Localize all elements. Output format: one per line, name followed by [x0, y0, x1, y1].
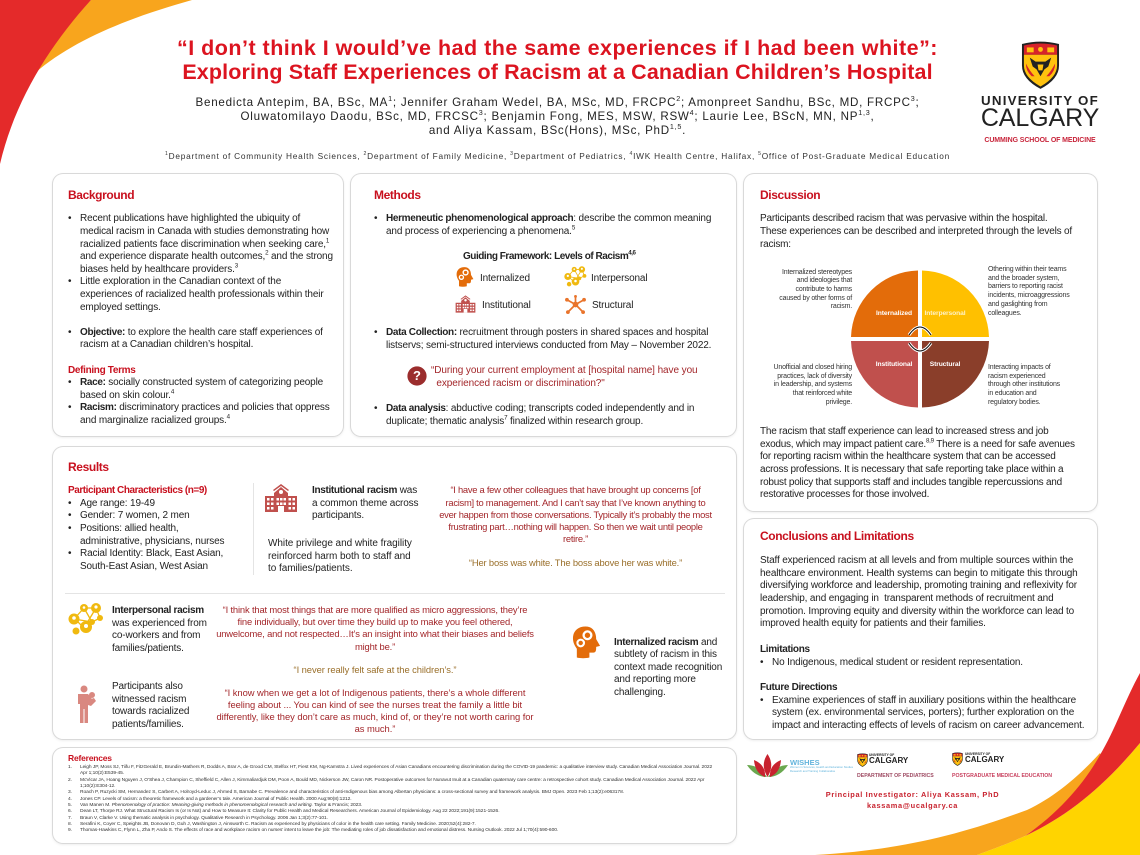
logo wordmark: Calgary: CALGARY [981, 104, 1099, 132]
white privilege text [268, 538, 412, 574]
reference list: 2. [68, 778, 72, 783]
icon: question mark [407, 366, 427, 386]
background text: based on skin colour.4 [80, 388, 174, 401]
label: institutional: Institutional [482, 300, 531, 311]
background text: Defining Terms [68, 365, 135, 376]
internalized racism text: subtlety of racism in this [614, 649, 717, 660]
logo: WISHES [747, 753, 847, 781]
quote: indigenous patients [216, 687, 534, 734]
corner swoosh: bottom right [816, 673, 1140, 855]
future directions: Examine experiences of staff in auxiliary positions within the healthcare [772, 695, 1076, 706]
background text: racism at a Canadian children’s hospital. [80, 339, 253, 350]
reference list: Thomas-Hawkins C, Flynn L, Zha P, Ando S. The effects of race and workplace racism on nurses’ intent to leave the job: The mediating roles of job dissatisfaction and emotional distress. Nursing Outlook. 2022 Jul 1;70(4):590-600. [80, 828, 558, 833]
participant characteristics: Positions: allied health, [80, 523, 179, 534]
reference list: 8. [68, 822, 72, 827]
background text: medical racism in Canada with studies demonstrating how [80, 226, 329, 237]
methods approach: Hermeneutic phenomenological approach: describe the common meaning [386, 213, 711, 224]
caption: internalized: and ideologies that [797, 277, 852, 284]
interpersonal racism text [112, 605, 207, 654]
internalized racism text [614, 637, 722, 700]
future directions: • [760, 695, 763, 706]
authors: Oluwatomilayo Daodu, BSc, MD, FRCSC3; Benjamin Fong, MES, MSW, RSW4; Laurie Lee, BScN, MN, NP1,3, [241, 108, 874, 123]
quote: institutional: retire.” [563, 533, 588, 544]
conclusions paragraph: leadership, and engaging in transparent methods of recruitment and [760, 593, 1053, 604]
background text: • [68, 327, 71, 338]
participant characteristics: • [68, 510, 71, 521]
institutional racism text: a common theme across [312, 498, 418, 509]
participant characteristics: administrative, physicians, nurses [80, 536, 224, 547]
conclusions paragraph: Staff experienced racism at all levels and from multiple sources within the [760, 555, 1073, 566]
interpersonal racism text: Interpersonal racism [112, 605, 204, 616]
future directions: impact and interacting effects of levels of racism on career advancement. [772, 720, 1084, 731]
authors: and Aliya Kassam, BSc(Hons), MSc, PhD1,5. [429, 122, 686, 137]
caption: internalized: contribute to harms [796, 286, 852, 293]
icon: network [564, 266, 586, 286]
data collection [374, 327, 711, 351]
quote: interpersonal: unwelcome, and not respected…It’s an insight into what their biases and beliefs [216, 628, 534, 639]
methods approach: • [374, 213, 377, 224]
reference list: McVicar JA, Hoang Nguyen J, O’Shea J, Champion C, Sheffield C, Allen J, Kimmaliardjuk DM, Poon A, Bould MD, Nickerson JW, Caron NR. Postoperative outcomes for Nunavut Inuit at a Canadian quaternary care centre: a retrospective cohort study. Canadian Medical Association Journal. 2022 Apr [80, 778, 704, 783]
icon: shield [1022, 42, 1060, 89]
caption: institutional: practices, lack of diversity [777, 373, 852, 380]
participant characteristics: South-East Asian, West Asian [80, 561, 208, 572]
internalized racism text: Internalized racism and [614, 637, 717, 648]
institutional racism text [312, 485, 418, 521]
reference list: Leigh JP, Moss SJ, Tiifu F, FitzGerald E, Brundin-Mathers R, Dodds A, Brar A, de Grood CM, Stelfox HT, Fiest KM, Ng-Kamstra J. Lived experiences of Asian Canadians encountering discrimination during the COVID-19 pandemic: a qualitative interview study. Canadian Medical Association Journal. 2022 [80, 765, 712, 770]
discussion intro: racism: [760, 239, 791, 250]
participant characteristics: Racial Identity: Black, East Asian, [80, 548, 223, 559]
conclusions paragraph: promotion. Improving equity and diversity within the workforce can lead to [760, 606, 1074, 617]
participant characteristics: • [68, 548, 71, 559]
heading: methods: Methods [374, 188, 421, 202]
data collection: Data Collection: recruitment through posters in shared spaces and hospital [386, 327, 708, 338]
discussion paragraph [760, 426, 1075, 500]
framework heading: Guiding Framework: Levels of Racism4,6 [463, 249, 635, 262]
icon: parent and child [78, 686, 96, 723]
quote: indigenous patients: “I know when we get a lot of Indigenous patients, there’s a whole different [225, 687, 525, 698]
principal investigator contact: Principal Investigator: Aliya Kassam, PhD [826, 790, 999, 799]
icon: interpersonal network [68, 603, 103, 634]
caption: internalized [779, 268, 852, 310]
reference list: 1. [68, 765, 72, 770]
background text: racialized patients face discrimination when seeking care,1 [80, 237, 329, 250]
title: “I don’t think I would’ve had the same experiences if I had been white”: [177, 36, 938, 60]
caption: institutional: in leadership, and systems [774, 381, 852, 388]
background text: • [68, 213, 71, 224]
methods approach: and process of experiencing a phenomena.5 [386, 225, 575, 237]
icon: building [456, 296, 476, 313]
background text: Objective: to explore the health care staff experiences of [80, 327, 323, 338]
quote: boss: “Her boss was white. The boss above her was white.” [469, 557, 682, 568]
quote: institutional: frustrating part…nothing will happen. So then we wait until people [448, 521, 703, 532]
background text: experiences of racialized health professionals within their [80, 289, 324, 300]
caption: internalized: caused by other forms of [779, 295, 852, 302]
participant characteristics: Age range: 19-49 [80, 498, 155, 509]
quote: institutional: “I have a few other colleagues that have brought up concerns [of [450, 484, 701, 495]
small wordmark: Calgary: CALGARY [965, 755, 1004, 764]
caption: interpersonal: Othering within their teams [988, 266, 1066, 273]
panel: methods [351, 174, 736, 436]
caption: interpersonal: colleagues. [988, 310, 1021, 317]
icon: head [456, 267, 474, 287]
pie label: interpersonal: Interpersonal [924, 310, 966, 317]
heading: background: Background [68, 188, 134, 202]
panel: background [53, 174, 343, 436]
corner swoosh: top left [0, 0, 192, 164]
caption: interpersonal: incidents, microaggressions [988, 292, 1070, 299]
discussion paragraph: robust policy that supports staff and includes tangible repercussions and [760, 477, 1062, 488]
future directions [760, 682, 1084, 731]
interview question [431, 365, 698, 389]
caption: structural [988, 364, 1060, 406]
background text: biases held by healthcare providers.3 [80, 263, 238, 275]
conclusions paragraph [760, 555, 1078, 629]
reference list: Dean LT, Thorpe RJ. What Structural Racism Is (or Is Not) and How to Measure It: Clarity for Public Health and Medical Researchers. American Journal of Epidemiology. Aug 22 2022;191(9):1521-1526. [80, 809, 499, 814]
institutional racism text: Institutional racism was [312, 485, 417, 496]
conclusions paragraph: diversifying workforce and leadership, promoting training and reflexivity for [760, 580, 1077, 591]
small wordmark: UNIVERSITY OF [869, 753, 894, 757]
data analysis: Data analysis: abductive coding; transcripts coded independently and in [386, 403, 694, 414]
internalized racism text: context made recognition [614, 662, 722, 673]
caption: interpersonal: and the broader system, [988, 275, 1059, 282]
data collection: • [374, 327, 377, 338]
background text: • [68, 377, 71, 388]
reference list: 1;10(2):E304-12. [80, 784, 115, 789]
authors [196, 94, 919, 137]
caption: structural: in education and [988, 390, 1036, 397]
reference list: Jones CP. Levels of racism: a theoretic framework and a gardener’s tale. American Journal of Public Health. 2000 Aug;90(8):1212. [80, 797, 352, 802]
discussion intro: Participants described racism that was pervasive within the hospital. [760, 213, 1047, 224]
discussion paragraph: The racism that staff experience can lead to increased stress and job [760, 426, 1048, 437]
icon: shield small [857, 753, 868, 767]
internalized racism text: challenging. [614, 687, 666, 698]
interpersonal racism text: co-workers and from [112, 630, 200, 641]
icon: structural [565, 295, 586, 314]
caption: interpersonal: barriers to reporting racist [988, 283, 1063, 290]
authors: Benedicta Antepim, BA, BSc, MA1; Jennifer Graham Wedel, BA, MSc, MD, FRCPC2; Amonpreet Sandhu, BSc, MD, FRCPC3; [196, 94, 919, 108]
heading: results: Results [68, 460, 109, 474]
white privilege text: White privilege and white fragility [268, 538, 412, 549]
limitations: Limitations [760, 644, 810, 655]
background text: • [68, 276, 71, 287]
heading: references: References [68, 753, 112, 763]
caption: structural: through other institutions [988, 381, 1060, 388]
quote: interpersonal: “I think that most things that are more qualified as micro aggressions, they’re [223, 604, 527, 615]
small wordmark: Calgary: CALGARY [869, 756, 908, 765]
quote: interpersonal [216, 604, 534, 652]
participant characteristics [68, 485, 224, 572]
caption: institutional: that reinforced white [793, 390, 852, 397]
small wordmark: UNIVERSITY OF [965, 752, 990, 756]
background text: and marginalize racialized groups.4 [80, 414, 230, 426]
background text: Race: socially constructed system of categorizing people [80, 377, 323, 388]
participant characteristics: Gender: 7 women, 2 men [80, 510, 190, 521]
reference list: 4. [68, 797, 72, 802]
witnessed racism text: witnessed racism [112, 694, 186, 705]
discussion intro [760, 213, 1072, 250]
caption: internalized: racism. [831, 303, 852, 310]
title [177, 36, 938, 84]
witnessed racism text: patients/families. [112, 719, 184, 730]
caption: structural: regulatory bodies. [988, 399, 1040, 406]
icon: lotus [747, 753, 789, 779]
interpersonal racism text: was experienced from [112, 618, 207, 629]
witnessed racism text [112, 681, 189, 730]
department label: DEPARTMENT OF PEDIATRICS [857, 773, 934, 779]
white privilege text: to families/patients. [268, 563, 353, 574]
methods approach [374, 213, 711, 237]
data collection: listservs; semi-structured interviews conducted from May – November 2022. [386, 340, 711, 351]
interview question: experienced racism or discrimination?" [436, 378, 605, 389]
wishes tagline: Women in Sciences, Health and Education Studies [790, 765, 853, 769]
icon: question mark: ? [413, 368, 421, 383]
department label: POSTGRADUATE MEDICAL EDUCATION [952, 772, 1052, 778]
label: structural: Structural [592, 300, 633, 311]
data analysis: • [374, 403, 377, 414]
limitations: No Indigenous, medical student or resident representation. [772, 657, 1023, 668]
wishes tagline [790, 766, 853, 773]
reference list: Serafini K, Coyer C, Speights JB, Donovan D, Guh J, Washington J, Ainsworth C. Racism as experienced by physicians of color in the health care setting. Family Medicine. 2020;52(4):282-7. [80, 822, 476, 827]
discussion paragraph: for reporting racism within the healthcare system that can be accessed [760, 451, 1056, 462]
discussion paragraph: exodus, which may impact patient care.8,9 There is a need for safe avenues [760, 437, 1075, 450]
background text: employed settings. [80, 302, 161, 313]
witnessed racism text: Participants also [112, 681, 183, 692]
wishes wordmark: WISHES [790, 758, 820, 767]
reference list: 7. [68, 816, 72, 821]
panel: references [53, 748, 736, 843]
framework legend [456, 266, 647, 314]
icon: shield small [952, 752, 963, 766]
future directions: Future Directions [760, 682, 837, 693]
label: interpersonal: Interpersonal [591, 273, 647, 284]
reference list: Braun V, Clarke V. Using thematic analysis in psychology. Qualitative Research in Psychology. 2006 Jan 1;3(2):77-101. [80, 816, 328, 821]
witnessed racism text: towards racialized [112, 706, 189, 717]
limitations [760, 644, 1023, 668]
heading: conclusions: Conclusions and Limitations [760, 529, 914, 543]
wishes tagline: Research and Training Collaborative [790, 768, 835, 772]
quote: interpersonal: fine individually, but over time they build up to make you feel othered, [238, 616, 512, 627]
affiliations: 1Department of Community Health Sciences, 2Department of Family Medicine, 3Department of Pediatrics, 4IWK Health Centre, Halifax, 5Office of Post-Graduate Medical Education [165, 151, 950, 161]
future directions: system (ex. environmental services, porters); further exploration on the [772, 707, 1074, 718]
reference list: Apr 1;10(2):E539-45. [80, 771, 124, 776]
icon: institutional building [265, 484, 297, 512]
quote: never felt safe: “I never really felt safe at the children’s.” [294, 664, 456, 675]
background text: Racism: discriminatory practices and policies that oppress [80, 402, 330, 413]
caption: institutional: Unofficial and closed hiring [774, 364, 852, 371]
logo wordmark: UNIVERSITY OF [981, 93, 1099, 108]
interpersonal racism text: families/patients. [112, 643, 184, 654]
quote: institutional [439, 484, 712, 544]
reference list: 9. [68, 828, 72, 833]
discussion paragraph: restorative processes for those involved. [760, 489, 929, 500]
panel: results [53, 447, 736, 739]
caption: interpersonal [988, 266, 1070, 317]
quote: indigenous patients: as much.” [355, 723, 395, 734]
logo subtitle: CUMMING SCHOOL OF MEDICINE [984, 137, 1096, 144]
white privilege text: reinforced harm both to staff and [268, 551, 411, 562]
background text: and experience disparate health outcomes,2 and the strong [80, 250, 333, 262]
reference list [68, 765, 712, 835]
data analysis [374, 403, 694, 427]
background text [68, 213, 333, 426]
discussion paragraph: across professions. It is necessary that safe reporting take place within a [760, 464, 1063, 475]
limitations: • [760, 657, 763, 668]
reference list: Van Manen M. Phenomenology of practice: Meaning-giving methods in phenomenological research and writing. Taylor & Francis; 2023. [80, 803, 362, 808]
logo: postgraduate medical education [952, 752, 1056, 780]
participant characteristics: Participant Characteristics (n=9) [68, 485, 207, 496]
panel: conclusions and limitations [744, 519, 1097, 739]
conclusions paragraph: healthcare environment. Health systems can begin to mitigate this through [760, 568, 1078, 579]
quote: indigenous patients: feeling about ... You can kind of see the nurses treat the family a little bit [228, 699, 522, 710]
heading: discussion: Discussion [760, 188, 820, 202]
caption: internalized: Internalized stereotypes [782, 268, 852, 276]
internalized racism text: and reporting more [614, 674, 696, 685]
quote: institutional: racism] to management. And I can’t say that I’ve known anything to [446, 497, 705, 508]
quote: indigenous patients: differently, like they don’t care as much, kind of, or they’re not worth caring for [216, 711, 534, 722]
pie label: structural: Structural [930, 361, 960, 368]
reference list: 5. [68, 803, 72, 808]
principal investigator contact: kassama@ucalgary.ca [867, 801, 958, 810]
pie label: institutional: Institutional [876, 361, 912, 368]
caption: interpersonal: and gaslighting from [988, 301, 1047, 308]
caption: institutional: privilege. [826, 399, 852, 406]
label: internalized: Internalized [480, 273, 530, 284]
background text: Little exploration in the Canadian context of the [80, 276, 281, 287]
principal investigator contact [800, 790, 1025, 811]
background text: Recent publications have highlighted the ubiquity of [80, 213, 300, 224]
pie label: internalized: Internalized [876, 310, 912, 317]
reference list: 3. [68, 790, 72, 795]
icon: internalized head [572, 626, 601, 659]
interview question: “During your current employment at [hospital name] have you [431, 365, 698, 376]
participant characteristics: • [68, 523, 71, 534]
panel: discussion [744, 174, 1097, 511]
title: Exploring Staff Experiences of Racism at a Canadian Children’s Hospital [182, 60, 933, 84]
logo: department of pediatrics [857, 753, 935, 781]
data analysis: duplicate; thematic analysis7 finalized within research group. [386, 415, 643, 427]
discussion intro: These experiences can be described and interpreted through the levels of [760, 226, 1072, 237]
participant characteristics: • [68, 498, 71, 509]
conclusions paragraph: improved health equity for patients and their families. [760, 618, 986, 629]
reference list: 6. [68, 809, 72, 814]
pie chart: levels of racism [851, 270, 989, 408]
quote: interpersonal: might be.” [355, 641, 395, 652]
background text: • [68, 402, 71, 413]
institutional racism text: participants. [312, 510, 364, 521]
caption: structural: Interacting impacts of [988, 364, 1051, 371]
caption: institutional [774, 364, 852, 406]
logo: University of Calgary [981, 42, 1099, 144]
quote: institutional: ever happen from those conversations. Typically it’s probably the most [439, 509, 712, 520]
reference list: Roach P, Ruzycki SM, Hernandez S, Carbert A, Holroyd-Leduc J, Ahmed S, Barnabe C. Prevalence and characteristics of anti-Indigenous bias among Albertan physicians: a cross-sectional survey and framework analysis. BMJ Open. 2023 Feb 1;13(2):e063178. [80, 790, 624, 795]
caption: structural: racism experienced [988, 373, 1045, 380]
